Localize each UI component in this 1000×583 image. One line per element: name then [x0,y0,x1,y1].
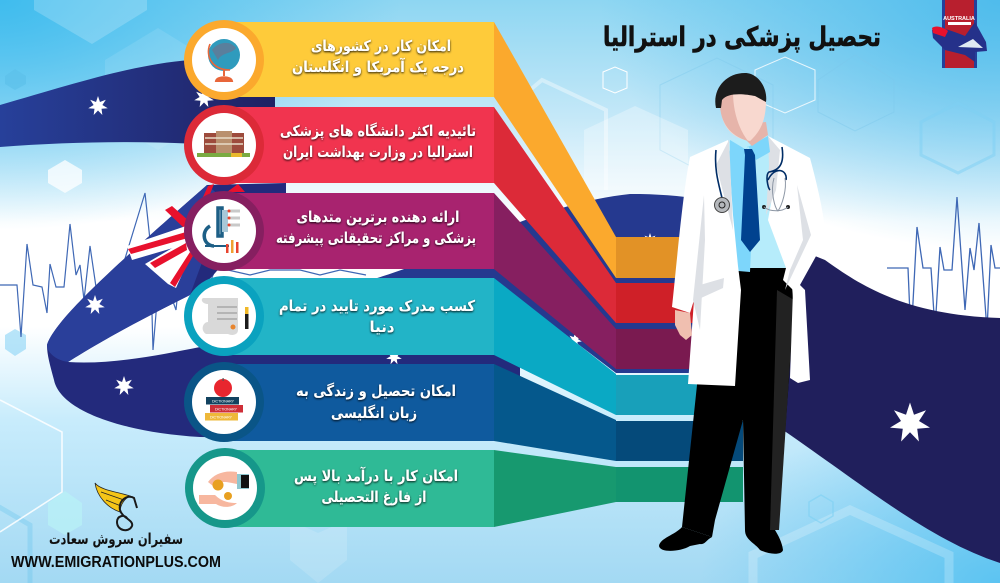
lapels [716,136,780,230]
ribbon step: dark blue [494,364,743,461]
tie [741,149,760,252]
text: banner 4: دنیا [370,318,395,336]
neck and face [738,122,768,146]
text: banner 3: ارائه دهنده برترین متدهای [296,208,460,226]
text: banner 5: زبان انگلیسی [331,404,417,422]
trousers [682,262,794,537]
flag ribbon: centre arc behind the banners [370,194,710,373]
text: banner 6: امکان کار با درآمد بالا پس [294,467,458,486]
ribbon step: green [494,450,743,527]
text: banner 2 [280,122,476,161]
doctor illustration [659,73,825,554]
panel: banner 6 green [185,448,494,528]
trouser side stripe [770,290,794,530]
text: banner 3 [276,208,476,248]
icon: apple and dictionaries: DICTIONARY [212,400,235,404]
icon: apple and dictionaries: DICTIONARY [215,408,238,412]
text: banner 1: درجه یک آمریکا و انگلستان [292,58,464,76]
flag ribbon: upper loop strip [47,185,225,362]
icon: hands and coins [199,471,249,507]
hand [675,310,692,340]
shirt [705,136,790,268]
ribbon step: red [494,107,706,323]
pocket [700,278,724,298]
icon: globe [208,39,240,81]
icon: Australia badge [932,0,987,68]
panel: banner 2 red [184,105,494,185]
sleeve shading [693,185,811,330]
flag ribbon: lower loop [47,183,520,441]
panel: banner 3 purple [184,191,494,271]
panel: banner 4 teal [184,276,494,356]
logo: website URL: WWW.EMIGRATIONPLUS.COM [11,554,221,571]
ribbon step: teal [494,278,743,415]
text: banner 2: تائیدیه اکثر دانشگاه های پزشکی [280,122,476,141]
shoes [659,527,783,554]
hair [715,73,766,108]
ECG line: left [0,193,366,350]
text: banner 4 [279,297,475,336]
flag ribbon: union jack corner [127,184,245,288]
title: تحصیل پزشکی در استرالیا [603,22,881,53]
collar [729,136,770,166]
icon: scroll certificate and pen [202,298,248,335]
flag ribbon: right navy wave [783,250,1000,563]
flag stars [85,88,930,441]
ribbon step: purple [494,193,706,369]
text: banner 1 [292,37,464,76]
text: banner 5: امکان تحصیل و زندگی به [296,382,456,400]
text: banner 4: کسب مدرک مورد تایید در تمام [279,297,475,315]
text: banner 1: امکان کار در کشورهای [311,37,451,55]
logo: winged mark [95,483,137,530]
icon: apple and dictionaries [205,378,243,420]
icon: microscope and report [204,208,240,253]
coat right [768,136,825,383]
text: banner 3: پزشکی و مراکز تحقیقاتی پیشرفته [276,229,476,248]
stethoscope [716,147,786,198]
text: banner 6: از فارغ التحصیلی [322,488,426,506]
icon: university building [197,131,250,157]
icon: Australia badge: AUSTRALIA [943,16,975,22]
flag ribbon: upper left band [0,60,275,150]
panel: banner 1 yellow [184,20,494,100]
text: banner 5 [296,382,456,422]
ribbon step: yellow [494,22,706,278]
text: banner 2: استرالیا در وزارت بهداشت ایران [283,143,473,161]
logo: company name: سفیران سروش سعادت [49,530,183,548]
text: banner 6 [294,467,458,506]
panel: banner 5 blue [184,362,494,442]
coat left [672,140,741,386]
ECG line: right [887,197,1000,340]
icon: apple and dictionaries: DICTIONARY [210,416,233,420]
